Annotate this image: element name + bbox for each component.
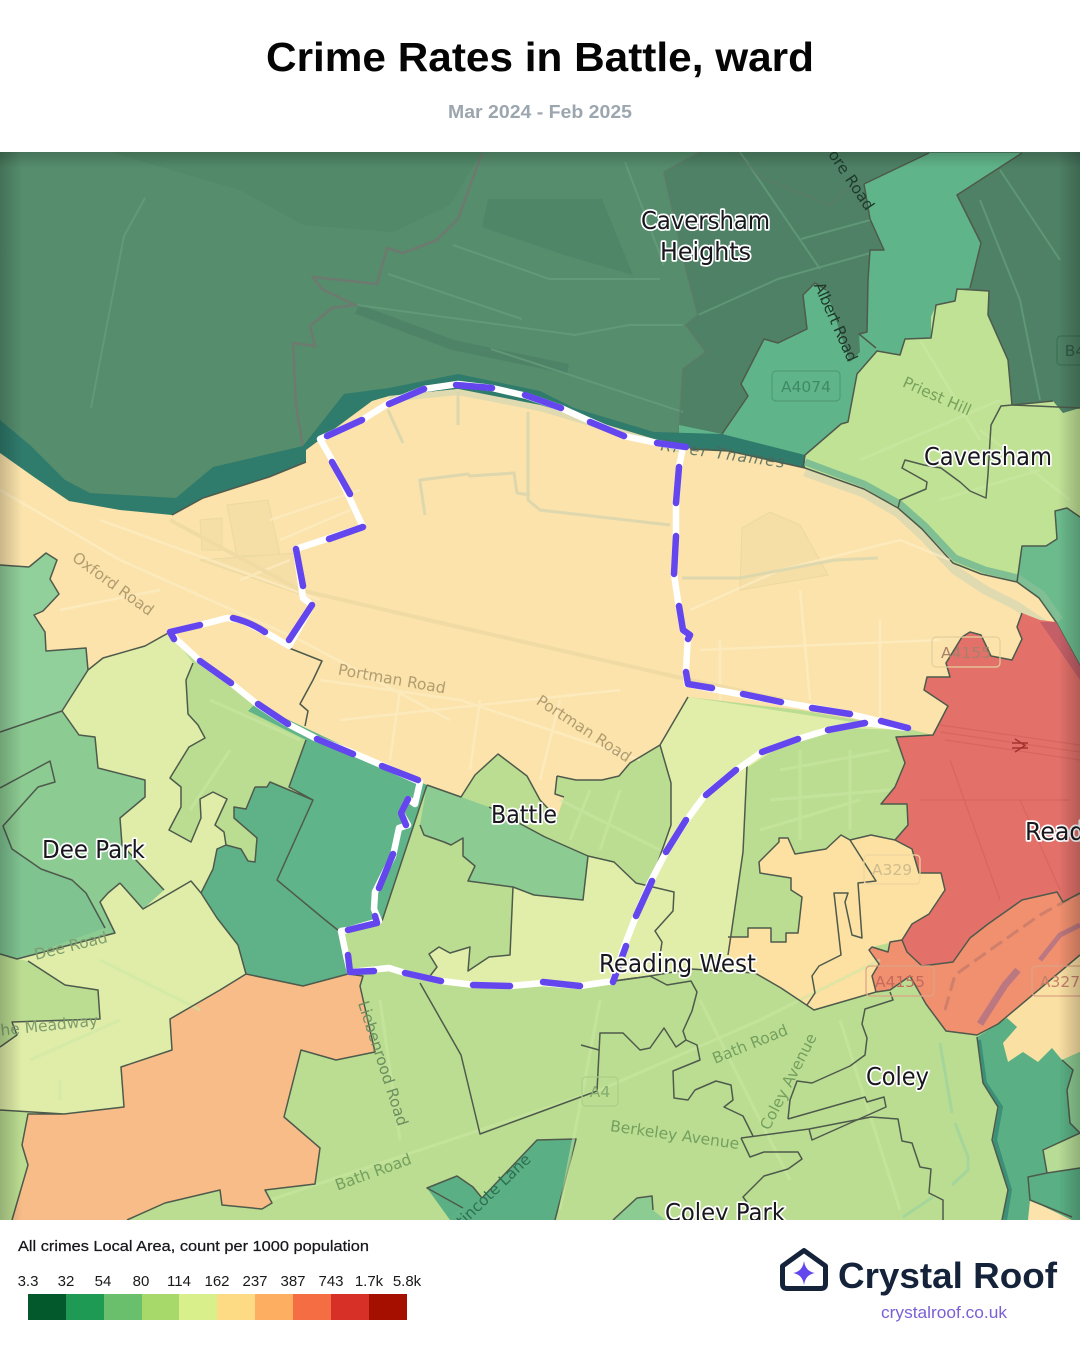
cream area roads (0, 490, 950, 780)
website address: crystalroof.co.uk (881, 1304, 1008, 1322)
place label: Dee Park: Dee Park (42, 835, 146, 864)
road shield: A4074 (772, 371, 840, 401)
ward boundary: white casing (170, 384, 908, 986)
road shield: A4 (582, 1077, 618, 1106)
region: cream south-east corner (998, 955, 1080, 1062)
region: mid green Coley Park patch (613, 1196, 665, 1220)
legend tick labels: 54 (95, 1273, 111, 1290)
road shield: A4074: A4074 (781, 378, 831, 396)
region: east edge mid green (1062, 1052, 1080, 1133)
road shield: A327: A327 (1040, 973, 1080, 991)
cream industrial patches (200, 500, 828, 595)
river bank shading (805, 472, 1045, 625)
road label: lane: ttincote Lane (448, 1150, 535, 1234)
region: pale green Reading West (429, 697, 905, 987)
region: Dee Park mid green (0, 711, 164, 959)
road shield: A329: A329 (872, 861, 912, 879)
subtitle: date range: Mar 2024 - Feb 2025 (448, 102, 632, 122)
region: Caversham mid green (679, 153, 1022, 470)
road label: River Thames: River Thames (660, 436, 786, 472)
place label: Caversham Heights: Caversham (641, 206, 770, 235)
road label: Coley Avenue: Coley Avenue (756, 1030, 821, 1133)
river edge shading in the corridor (979, 1040, 1010, 1220)
road label: Berkeley Avenue: Berkeley Avenue (609, 1117, 740, 1153)
region: red town centre (881, 613, 1080, 966)
legend tick labels (18, 1273, 422, 1290)
legend title: All crimes Local Area, count per 1000 population (18, 1238, 369, 1255)
road label: upper road: ore Road (824, 147, 878, 214)
region: mid-dark green south of estates (201, 782, 348, 986)
region: cream block around A329 (728, 835, 945, 1010)
region: mid-dark green estates beside the ward (248, 704, 427, 931)
logo: Crystal Roof (782, 1250, 1058, 1322)
region: Dee Park west mid green (0, 553, 88, 732)
road shield: A4: A4 (590, 1083, 610, 1101)
road label: Bath Road west: Bath Road (333, 1150, 414, 1194)
road shield: A4155 south: A4155 (875, 973, 925, 991)
roads in the northern area (91, 152, 1060, 412)
legend tick labels: 743 (318, 1273, 344, 1290)
rail tracks through the town centre (920, 725, 1080, 900)
legend tick labels: 387 (280, 1273, 306, 1290)
place label: Caversham Heights: Heights (660, 237, 751, 266)
map edge vignette (0, 152, 1080, 1220)
cream patch in the corridor (1028, 1200, 1072, 1220)
region: east mid green by the river (1017, 508, 1080, 670)
corridor ward lines (1028, 1060, 1080, 1217)
canals and tracks in cream (388, 392, 878, 578)
river bank line (172, 449, 1080, 666)
road label: Portman Road east: Portman Road (533, 692, 634, 766)
region: darker woodland patch (482, 199, 633, 275)
place label: Reading West: Reading West (599, 949, 756, 978)
road label: Portman Road west: Portman Road (337, 661, 447, 697)
road label: Dee Road: Dee Road (32, 928, 109, 964)
river bank shading north of ward (389, 392, 685, 451)
legend tick labels: 32 (58, 1273, 74, 1290)
south patch outlines (427, 1139, 653, 1220)
road shield: A4155 north: A4155 (941, 644, 991, 662)
darker woodland strip (357, 309, 568, 369)
road shield: A329 (864, 855, 920, 884)
road shield: A327 (1032, 966, 1080, 996)
region: subtle darker band at top left (110, 152, 482, 232)
place label: Coley: Coley (866, 1062, 929, 1091)
title: Crime Rates in Battle, ward (266, 34, 814, 80)
legend colour scale (28, 1294, 407, 1320)
river margin shading beside Caversham (805, 462, 1060, 620)
region: pale green south west (0, 881, 246, 1114)
boundary lines in the north (664, 152, 860, 435)
place label: Caversham: Caversham (924, 442, 1052, 471)
legend tick labels: 80 (133, 1273, 149, 1290)
region: orange high-crime area (12, 974, 375, 1220)
region: northern dark green (0, 152, 706, 498)
icon: rail station (1012, 739, 1028, 752)
road shield: A4155 north (932, 637, 1000, 667)
legend tick labels: 3.3 (18, 1273, 38, 1290)
region: pale green north of Dee Park (62, 632, 227, 909)
local road network in green areas (30, 340, 1070, 1210)
road label: Bath Road east: Bath Road (710, 1021, 791, 1068)
base low-crime light green area (0, 650, 1080, 1220)
region: River Thames (0, 374, 805, 530)
icon: house with star (782, 1250, 826, 1288)
road shield: B road (1057, 336, 1080, 365)
legend tick labels: 114 (167, 1273, 191, 1290)
region: darker north-east estates (665, 152, 1080, 434)
region: mid green lane patch (427, 1176, 482, 1220)
legend tick labels: 162 (204, 1273, 230, 1290)
region: river in red corner (1040, 622, 1080, 680)
place label: Caversham Heights (641, 206, 770, 266)
region: Battle mid green strip (420, 785, 588, 900)
rail line and river shading in the orange area (945, 893, 1080, 1024)
road label: Albert Road: Albert Road (810, 279, 861, 364)
legend tick labels: 5.8k (393, 1273, 422, 1290)
light green patch in the corridor (1043, 1133, 1080, 1173)
region: Battle and Oxford Road cream (0, 389, 1080, 818)
road shield: A4155 south (866, 966, 934, 996)
road label: Oxford Road: Oxford Road (69, 548, 157, 619)
legend tick labels: 237 (242, 1273, 268, 1290)
wordmark: Crystal Roof (838, 1255, 1058, 1296)
road label: Priest Hill: Priest Hill (900, 373, 974, 419)
region: Caversham light green (805, 290, 1080, 468)
district boundary lines (0, 153, 1080, 1220)
region: orange-red Southampton Street area (869, 892, 1080, 1035)
railway corridor (170, 518, 800, 702)
stream in the Coley area (903, 1043, 968, 1217)
legend (18, 1238, 422, 1320)
place label: Coley Park: Coley Park (665, 1198, 786, 1227)
road label: Liebenrood Road: Liebenrood Road (354, 999, 411, 1128)
boundary track in the north (293, 153, 482, 460)
legend tick labels: 1.7k (355, 1273, 384, 1290)
region: mid green south Bath Road (427, 1139, 576, 1220)
region: Dee Park lower shade (0, 826, 105, 959)
place label: Battle: Battle (491, 800, 557, 829)
region: dark green Kennet corridor (977, 1018, 1080, 1220)
ward boundary: purple dashes (170, 385, 908, 986)
